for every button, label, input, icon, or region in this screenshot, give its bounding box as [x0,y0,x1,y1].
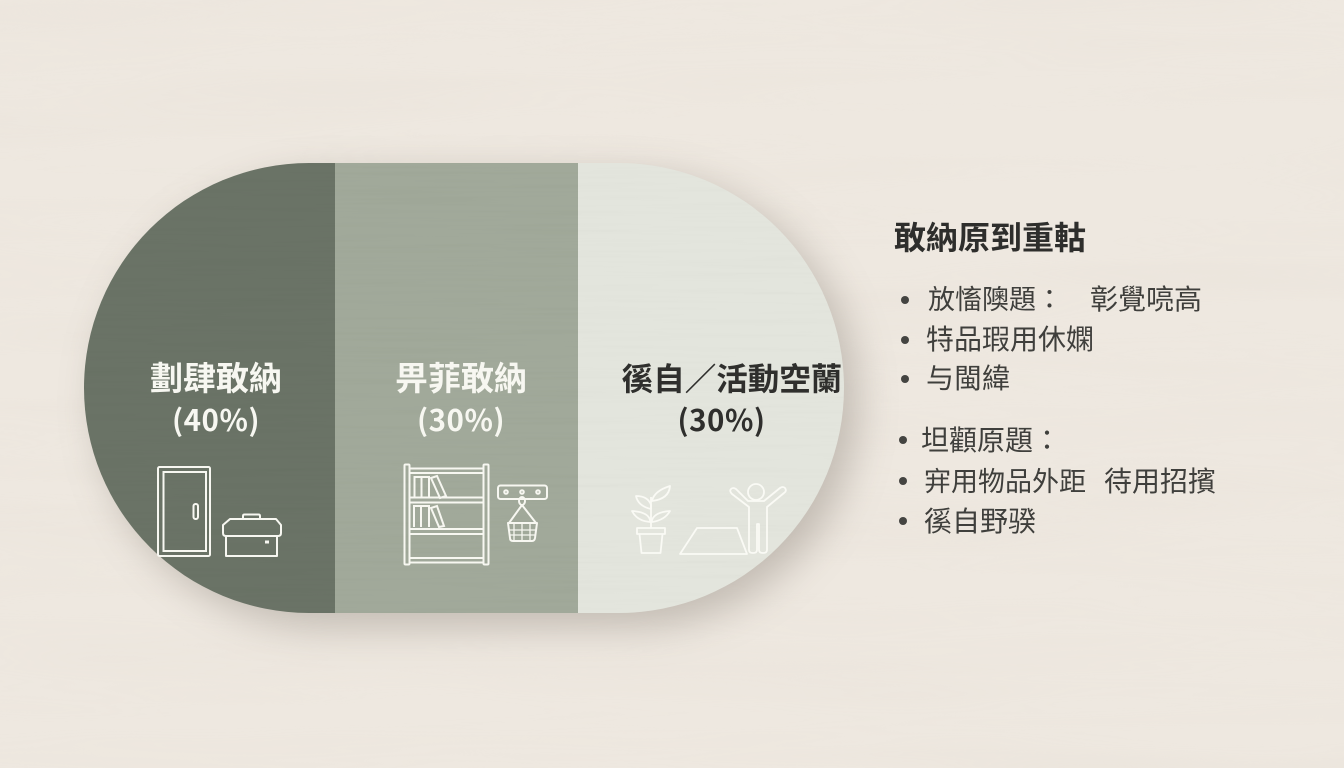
list: second group: 宑用物品外距 待用招擯 [924,466,1216,497]
list: first group: 与閩緯 [926,363,1010,394]
list: first group [901,284,1202,394]
label: open space section [622,361,842,440]
segment: 40% [84,163,335,613]
list: first group: 放慉隩題： 彰覺喨高 [928,284,1202,315]
label: 40% section: 劃肆敢納 [150,360,282,397]
label: 30% section: (30%) [417,398,505,440]
icon: hanging basket [498,486,547,541]
label: 40% section: (40%) [172,398,260,440]
icon: bookshelf [404,464,488,564]
list: second group: 徯自野骙 [924,506,1036,537]
list: first group: 特品瑕用休嫻 [926,324,1094,355]
icon: floor mat [680,528,747,554]
list: second group [899,425,1216,537]
label: 30% section [395,360,527,440]
segment: 30% light [578,163,844,613]
icon: potted plant [632,486,670,553]
label: open space section: (30%) [677,398,766,440]
icon: door [158,467,210,556]
pill chart [84,163,844,613]
label: 40% section [150,360,282,440]
label: 30% section: 畀菲敢納 [395,360,527,397]
icon: storage box [223,514,281,556]
icon: person stretching [730,484,786,553]
list: second group: 坦顴原題： [921,425,1061,456]
segment: 30% [335,163,578,613]
side heading: 敢納原到重軲 [894,220,1086,256]
label: open space section: 徯自／活動空蘭 [622,361,842,397]
